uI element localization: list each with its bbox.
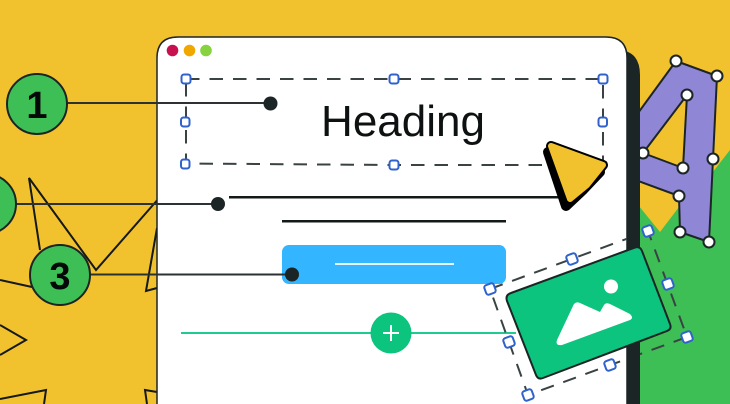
callout 3 bbox=[30, 245, 299, 305]
browser page panel bbox=[157, 37, 627, 404]
callout 2 bbox=[0, 174, 225, 234]
letter 4 shape bbox=[630, 56, 722, 248]
arrow cursor bbox=[548, 146, 603, 206]
callout 1 bbox=[7, 74, 278, 134]
blue button bbox=[282, 245, 506, 284]
image card bbox=[506, 247, 671, 379]
heading text: Heading bbox=[321, 97, 485, 146]
page shadow overlap bbox=[627, 225, 640, 404]
green blob background bbox=[630, 150, 730, 404]
page drop shadow bbox=[600, 50, 640, 404]
starburst outline background bbox=[0, 178, 160, 404]
text line 1 bbox=[229, 196, 561, 198]
image icon sun bbox=[604, 280, 618, 294]
window controls bbox=[167, 45, 212, 56]
image icon mountains bbox=[557, 302, 632, 345]
divider with add button bbox=[181, 312, 516, 354]
callout 1: 1 bbox=[26, 85, 48, 127]
text line 2 bbox=[282, 220, 506, 222]
callout 3: 3 bbox=[49, 256, 71, 298]
image selection frame bbox=[490, 231, 687, 395]
image selection handles bbox=[484, 225, 693, 401]
heading selection frame bbox=[181, 74, 608, 170]
